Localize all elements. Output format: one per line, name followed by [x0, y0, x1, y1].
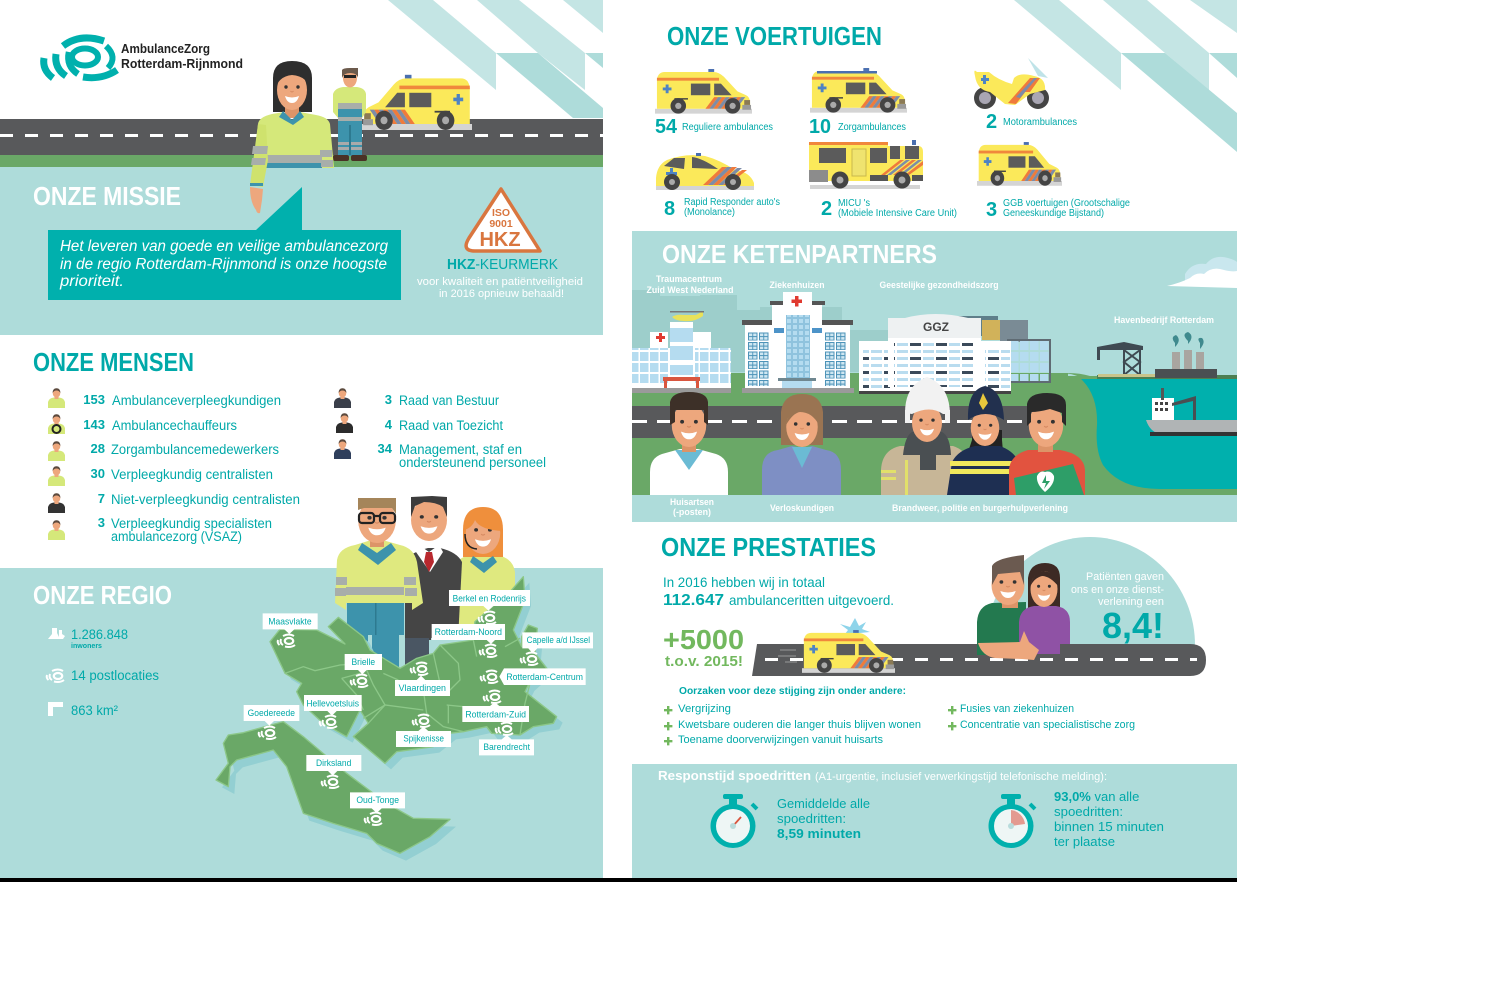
background stripes: right page: [1014, 0, 1237, 152]
illustration: ground and water: [632, 364, 1237, 495]
stats: regio: 863 km²: [71, 703, 118, 718]
vehicle: zorgambulance: 10: [809, 116, 831, 138]
text: aantal ritten: [663, 574, 894, 609]
illustration: satisfaction dome: ons en onze dienst-: [1071, 584, 1164, 596]
illustration: paramedic man: [333, 68, 367, 161]
title: onze ketenpartners: ONZE KETENPARTNERS: [662, 239, 937, 269]
vehicle: rapid responder: [656, 153, 780, 220]
list: staff right column: ondersteunend personeel: [399, 455, 546, 470]
black footer bar: [0, 878, 1237, 882]
labels: partners: Zuid West Nederland: [646, 285, 734, 296]
illustration: trauma centre: [632, 311, 731, 393]
heading: responstijd: (A1-urgentie, inclusief verwerkingstijd telefonische melding):: [815, 771, 1107, 783]
list: staff left column: 153: [83, 392, 105, 407]
list: causes: Vergrijzing: [678, 703, 731, 715]
map: regio: Berkel en Rodenrijs: [453, 593, 526, 603]
icon: stopwatch average: [710, 794, 757, 848]
stat: plus 5000: t.o.v. 2015!: [665, 653, 743, 670]
text: gemiddelde: spoedritten:: [777, 811, 846, 826]
vehicle: rapid responder: (Monolance): [684, 207, 735, 218]
labels: partners: Verloskundigen: [770, 503, 834, 514]
map: regio: Capelle a/d IJssel: [527, 635, 590, 645]
vehicle: reguliere ambulance: [655, 69, 773, 138]
labels: partners: Geestelijke gezondheidszorg: [880, 280, 999, 291]
vehicle: GGB: 3: [986, 199, 997, 221]
illustration: cloud: [1167, 257, 1237, 288]
illustration: ship: [1146, 388, 1237, 436]
callout: mission statement: Het leveren van goede en veilige ambulancezorg: [60, 238, 388, 255]
list: causes: [664, 685, 1135, 746]
text: percentage: ter plaatse: [1054, 834, 1115, 849]
vehicle: motorambulance: 2: [986, 111, 997, 133]
badge: HKZ keurmerk: ISO: [492, 207, 510, 219]
illustration: hospital: [742, 292, 854, 393]
map: regio: Rotterdam-Noord: [435, 627, 502, 637]
illustration: road with dashes: [752, 644, 1206, 676]
list: staff right column: 34: [378, 441, 393, 456]
list: staff left column: 3: [98, 515, 105, 530]
illustration: three staff members: [335, 496, 515, 670]
list: causes: Kwetsbare ouderen die langer thuis blijven wonen: [678, 719, 921, 731]
logo: AmbulanceZorg: [121, 41, 210, 56]
vehicle: rapid responder: Rapid Responder auto's: [684, 197, 780, 208]
title: onze voertuigen: ONZE VOERTUIGEN: [667, 21, 882, 51]
person: doctor: [650, 392, 728, 495]
map: regio: Rotterdam-Centrum: [506, 672, 583, 682]
person: police officer: [947, 386, 1020, 495]
vehicle: reguliere ambulance: 54: [655, 116, 678, 138]
list: staff right column: Raad van Toezicht: [399, 418, 503, 433]
list: causes: Fusies van ziekenhuizen: [960, 703, 1074, 715]
list: staff left column: Zorgambulancemedewerkers: [111, 442, 279, 457]
map: regio: [216, 577, 593, 861]
labels: partners: Havenbedrijf Rotterdam: [1114, 315, 1214, 326]
list: staff right column: 3: [385, 392, 392, 407]
labels: partners: Huisartsen: [670, 497, 714, 508]
illustration: GGZ building: [859, 314, 1050, 394]
vehicle: GGB: [977, 142, 1130, 221]
labels: partners: [646, 274, 1214, 518]
illustration: paramedic woman pointing: [250, 61, 334, 213]
text: aantal ritten: ambulanceritten uitgevoerd.: [729, 592, 894, 608]
labels: partners: Traumacentrum: [656, 274, 722, 285]
illustration: ambulance with siren: [778, 618, 895, 673]
illustration: satisfaction dome: 8,4!: [1102, 605, 1164, 646]
stat: plus 5000: [663, 624, 744, 670]
illustration: satisfaction dome: verlening een: [1098, 596, 1164, 608]
stats: regio: 1.286.848: [71, 627, 128, 642]
text: gemiddelde: 8,59 minuten: [777, 826, 861, 841]
list: staff left column: 143: [83, 417, 105, 432]
logo: [44, 38, 243, 78]
list: staff left column: Ambulancechauffeurs: [112, 418, 237, 433]
list: staff right column: 4: [385, 417, 393, 432]
vehicle: motorambulance: Motorambulances: [1003, 117, 1077, 128]
stats: regio: 14 postlocaties: [71, 668, 159, 683]
badge: HKZ keurmerk: 9001: [489, 218, 513, 230]
stats: regio: [47, 627, 159, 718]
vehicle: MICU: MICU 's: [838, 198, 870, 209]
person: firefighter: [881, 377, 968, 495]
badge: HKZ keurmerk: HKZ: [479, 229, 521, 251]
background stripes: left page: [388, 0, 603, 118]
map: regio: Maasvlakte: [268, 616, 312, 626]
person: midwife: [762, 394, 841, 495]
list: staff left column: Ambulanceverpleegkundigen: [112, 393, 281, 408]
text: percentage: 93,0% van alle: [1054, 789, 1139, 804]
panel: responstijd: [632, 764, 1237, 878]
labels: partners: Brandweer, politie en burgerhulpverlening: [892, 503, 1068, 514]
vehicle: MICU: [809, 140, 957, 220]
map: regio: Vlaardingen: [399, 683, 446, 693]
callout: mission statement: [48, 187, 401, 300]
icon: stopwatch percentage: [988, 794, 1035, 848]
text: percentage: binnen 15 minuten: [1054, 819, 1164, 834]
illustration: city skyline: [632, 290, 900, 372]
person: aed responder: [1009, 393, 1085, 495]
list: staff left column: ambulancezorg (VSAZ): [111, 529, 242, 544]
badge: HKZ keurmerk: HKZ-KEURMERK: [447, 257, 558, 273]
illustration: satisfaction dome: Patiënten gaven: [1086, 571, 1164, 583]
title: onze prestaties: ONZE PRESTATIES: [661, 532, 876, 562]
stats: regio: inwoners: [71, 641, 102, 650]
map: regio: Barendrecht: [483, 742, 530, 752]
list: causes: Concentratie van specialistische zorg: [960, 719, 1135, 731]
vehicle: motorambulance: [974, 58, 1077, 133]
map: regio: Rotterdam-Zuid: [465, 709, 526, 719]
callout: mission statement: prioriteit.: [59, 273, 124, 290]
map: regio: Oud-Tonge: [356, 795, 399, 805]
list: staff right column: Management, staf en: [399, 442, 522, 457]
vehicle: GGB: Geneeskundige Bijstand): [1003, 208, 1104, 219]
illustration: happy couple: [977, 555, 1070, 660]
list: staff left column: 7: [98, 491, 105, 506]
map: regio: Dirksland: [316, 758, 351, 768]
road: [0, 119, 603, 167]
map: regio: Hellevoetsluis: [306, 698, 359, 708]
map: regio: Spijkenisse: [403, 733, 444, 743]
heading: responstijd: Responstijd spoedritten: [658, 768, 811, 783]
vehicle: zorgambulance: Zorgambulances: [838, 122, 906, 133]
list: causes: Oorzaken voor deze stijging zijn onder andere:: [679, 685, 906, 697]
map: regio: Brielle: [351, 657, 375, 667]
callout: mission statement: in de regio Rotterdam-Rijnmond is onze hoogste: [60, 256, 387, 273]
vehicle: GGB: GGB voertuigen (Grootschalige: [1003, 198, 1130, 209]
vehicle: MICU: (Mobiele Intensive Care Unit): [838, 208, 957, 219]
list: staff left column: Verpleegkundig specialisten: [111, 516, 272, 531]
text: percentage: spoedritten:: [1054, 804, 1123, 819]
title: onze missie: ONZE MISSIE: [33, 181, 181, 211]
text: gemiddelde: Gemiddelde alle: [777, 796, 870, 811]
badge: HKZ keurmerk: [417, 189, 583, 300]
panel: onze regio background: [0, 568, 603, 878]
title: onze mensen: ONZE MENSEN: [33, 347, 194, 377]
labels: partners: Ziekenhuizen: [770, 280, 825, 291]
heading: responstijd: [658, 768, 1107, 783]
logo: Rotterdam-Rijnmond: [121, 56, 243, 71]
text: aantal ritten: 112.647: [663, 592, 724, 609]
map: regio: Goedereede: [248, 708, 295, 718]
illustration: GGZ building: GGZ: [923, 320, 949, 334]
list: staff left column: [48, 388, 300, 544]
panel: onze missie background: [0, 167, 603, 335]
stat: plus 5000: +5000: [663, 624, 744, 655]
list: causes: Toename doorverwijzingen vanuit huisarts: [678, 734, 883, 746]
text: percentage: [1054, 789, 1164, 849]
title: onze regio: ONZE REGIO: [33, 580, 172, 610]
vehicle: zorgambulance: [809, 68, 907, 138]
list: staff left column: Niet-verpleegkundig centralisten: [111, 492, 300, 507]
illustration: crane and factory: [1097, 332, 1217, 378]
badge: HKZ keurmerk: voor kwaliteit en patiëntveiligheid: [417, 276, 583, 288]
text: gemiddelde: [777, 796, 870, 841]
list: staff left column: 30: [91, 466, 105, 481]
illustration: road: [632, 406, 1045, 438]
list: staff left column: Verpleegkundig centralisten: [111, 467, 273, 482]
illustration: satisfaction dome: [985, 537, 1195, 646]
text: aantal ritten: In 2016 hebben wij in totaal: [663, 574, 825, 590]
labels: partners: (-posten): [673, 507, 711, 518]
vehicle: reguliere ambulance: Reguliere ambulances: [682, 122, 773, 133]
vehicle: rapid responder: 8: [664, 198, 675, 220]
badge: HKZ keurmerk: in 2016 opnieuw behaald!: [439, 288, 564, 300]
illustration: ambulance on road: [362, 75, 472, 130]
list: staff right column: Raad van Bestuur: [399, 393, 499, 408]
panel: onze ketenpartners: [632, 231, 1237, 522]
list: staff left column: 28: [91, 441, 105, 456]
list: staff right column: [334, 388, 546, 470]
vehicle: MICU: 2: [821, 198, 832, 220]
